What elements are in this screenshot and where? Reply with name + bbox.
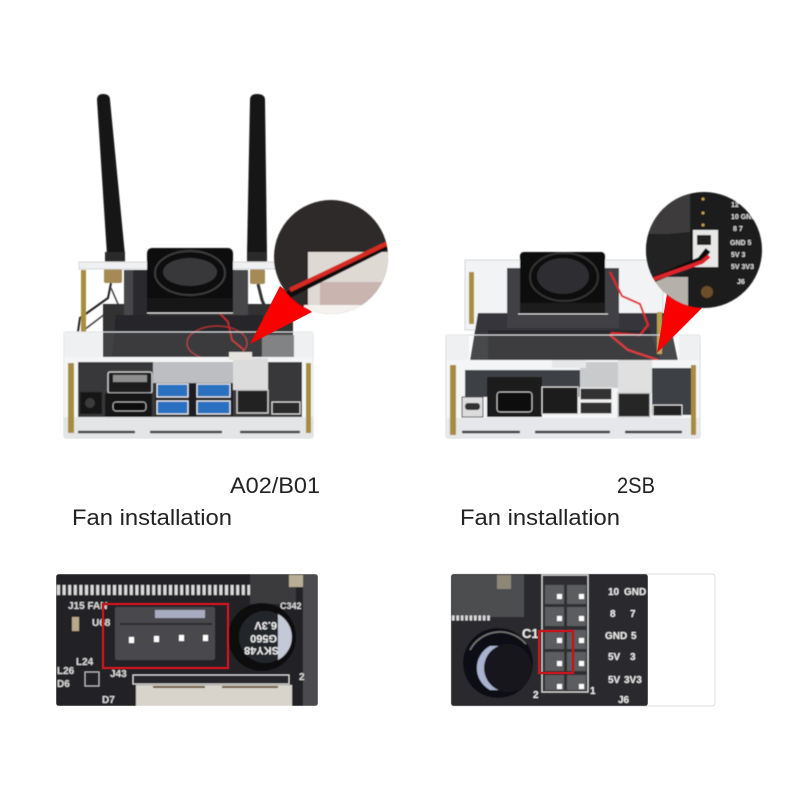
- rear acrylic plate: [79, 262, 291, 269]
- panel: left board close-up: D6: [57, 679, 70, 690]
- heading: left fan installation: Fan installation: [72, 505, 232, 530]
- panel: left board close-up: L24: [76, 657, 94, 668]
- connector: [115, 607, 215, 660]
- panel: left board close-up: SKY48: [244, 644, 279, 656]
- panel: left board close-up: 2: [299, 672, 305, 683]
- panel: left board close-up: U68: [92, 618, 111, 629]
- panel: right board close-up: 2: [533, 690, 539, 701]
- panel: right board close-up: 3V3: [624, 675, 642, 686]
- panel: left board close-up: [56, 574, 318, 706]
- panel: right board close-up: 5: [631, 631, 637, 642]
- panel: right board close-up: 5V: [608, 675, 621, 686]
- panel: left board close-up: J15 FAN: [68, 601, 107, 612]
- capacitor: [463, 628, 533, 698]
- antenna: right: [247, 94, 268, 314]
- comb connector: [57, 585, 250, 595]
- device photo: 2SB with fan: [446, 252, 700, 438]
- zoom callout: right fan connector: 10 GND: [731, 214, 756, 221]
- arrow: right red pointer: [657, 294, 702, 353]
- transparent front case: [64, 332, 313, 438]
- device photo: A02/B01 with antennas and fan: [64, 94, 313, 438]
- highlight box: [103, 604, 228, 668]
- board and heatsink: [103, 304, 293, 358]
- panel: right board close-up: 10: [608, 587, 620, 598]
- zoom callout: right fan connector: 8 7: [733, 226, 743, 233]
- panel: right board close-up: 7: [630, 609, 636, 620]
- panel: right board close-up: 1: [590, 686, 596, 697]
- ports: [462, 377, 682, 417]
- rear acrylic plate: [465, 260, 663, 330]
- zoom callout: right fan connector: [644, 190, 766, 311]
- cooling fan: [518, 252, 608, 315]
- zoom callout: right fan connector: GND 5: [730, 240, 752, 247]
- heading: right fan installation: Fan installation: [460, 505, 620, 530]
- zoom callout: right fan connector: 5V 3V3: [731, 264, 754, 271]
- zoom callout: right fan connector: 5V 3: [731, 252, 746, 259]
- panel: left board close-up: G560: [250, 632, 277, 644]
- cooling fan: [147, 248, 233, 313]
- antenna: left: [76, 94, 125, 345]
- panel: right board close-up: 3: [630, 652, 636, 663]
- silver socket: [133, 675, 289, 684]
- zoom callout: right fan connector: 12: [731, 202, 739, 209]
- panel: left board close-up: 6.3V: [254, 619, 277, 631]
- zoom callout: right fan connector: J6: [737, 279, 745, 286]
- arrow: left red pointer: [250, 286, 312, 344]
- panel: right board close-up: 5V: [608, 652, 621, 663]
- panel: right board close-up: [451, 574, 715, 706]
- transparent front case: [446, 335, 700, 438]
- panel: left board close-up: L26: [57, 666, 75, 677]
- panel: right board close-up: 8: [610, 609, 616, 620]
- panel: right board close-up: GND: [624, 587, 646, 598]
- board and heatsink: [470, 313, 678, 361]
- panel: left board close-up: J43: [110, 669, 127, 680]
- highlight box: [539, 631, 573, 673]
- zoom callout: left fan connector: [270, 198, 390, 318]
- ports: [80, 372, 300, 417]
- panel: left board close-up: D7: [102, 695, 115, 706]
- label: 2SB: 2SB: [617, 473, 655, 498]
- panel: right board close-up: GND: [605, 631, 627, 642]
- panel: right board close-up: C1: [522, 626, 539, 641]
- label: A02/B01: A02/B01: [230, 473, 320, 498]
- capacitor: [228, 603, 296, 671]
- pin header: [542, 575, 588, 692]
- panel: right board close-up: J6: [618, 695, 630, 706]
- panel: left board close-up: C342: [280, 601, 302, 611]
